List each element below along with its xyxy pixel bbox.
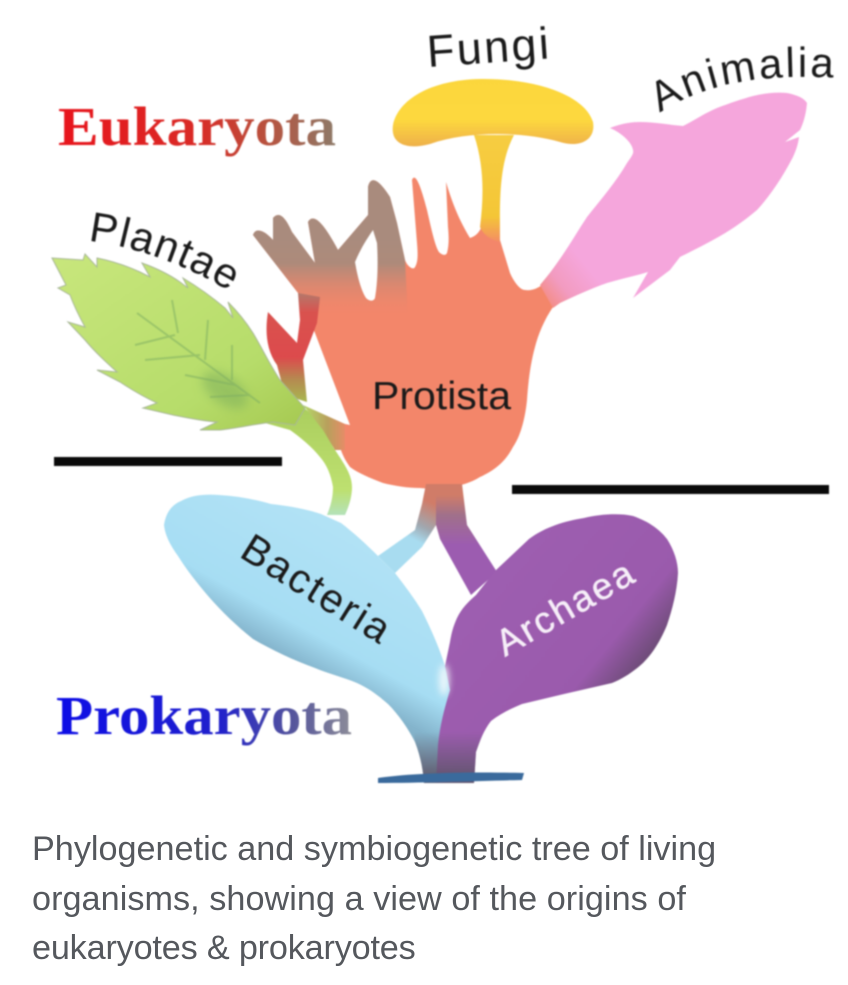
highlight at trunk junction <box>439 664 449 696</box>
cell: Bacteria <box>164 495 450 783</box>
link: root to Bacteria <box>378 484 450 573</box>
branch: Animalia <box>540 93 807 308</box>
gap between antlers and fingers <box>355 230 378 301</box>
caption: Phylogenetic and symbiogenetic tree of living <box>32 830 716 868</box>
label: Plantae: Plantae <box>90 212 237 289</box>
branch: Plantae stem <box>265 380 352 515</box>
cell: Archaea <box>424 514 678 783</box>
divider line right <box>512 485 829 494</box>
label: Protista: Protista <box>372 375 511 418</box>
leaf veins <box>135 300 260 416</box>
heading: Prokaryota: Prokaryota <box>56 685 352 746</box>
label: Archaea: Archaea <box>488 552 641 664</box>
label: Animalia: Animalia <box>655 45 834 114</box>
branch: Fungi <box>393 79 593 242</box>
link: Plantae stem to Protista <box>303 405 345 450</box>
link: root to Archaea <box>436 484 497 595</box>
body: Protista <box>253 178 553 489</box>
label: Bacteria: Bacteria <box>233 525 399 652</box>
label: Fungi: Fungi <box>425 18 550 77</box>
branch: red bud <box>267 293 320 402</box>
leaf: Plantae <box>52 254 305 430</box>
trunk <box>414 732 484 783</box>
caption: organisms, showing a view of the origins of <box>32 880 686 918</box>
heading: Eukaryota: Eukaryota <box>58 96 336 157</box>
caption: eukaryotes & prokaryotes <box>32 929 416 967</box>
divider line left <box>54 457 282 466</box>
ground line <box>378 773 524 783</box>
caption <box>32 830 716 967</box>
branch: antlers <box>253 180 408 318</box>
